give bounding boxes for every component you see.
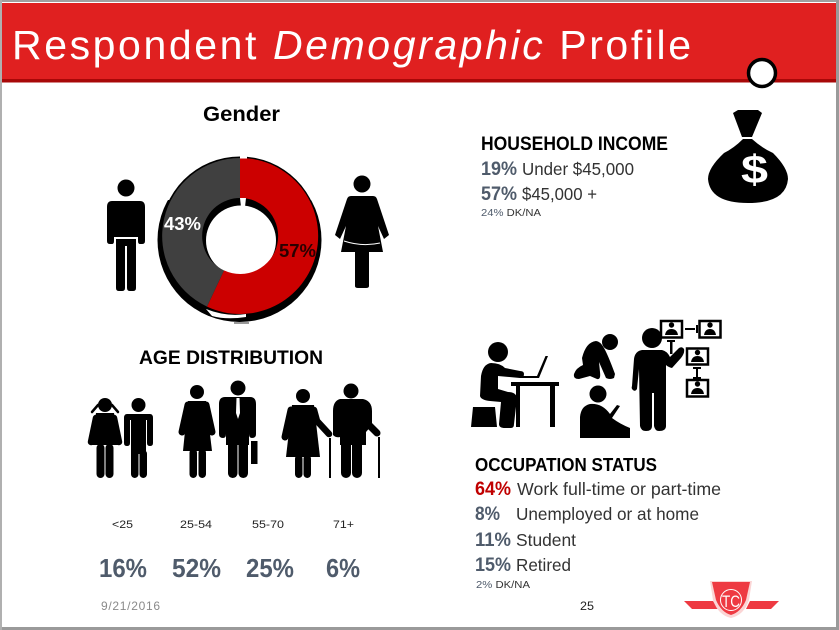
age labels: <25 [112,519,133,531]
income under 45000: 19% [481,159,517,180]
household income block [481,134,668,219]
occupation status block [475,454,721,591]
income under 45000: Under $45,000 [522,159,634,179]
page number: 25 [580,599,594,613]
occupation: unemployed: 8% [475,504,500,525]
label 43%: 43% [164,214,201,234]
age labels [112,519,354,531]
donut chart: gender [157,156,322,324]
icon: man [107,180,145,291]
icon: sitting child with tablet [580,386,630,438]
icon: TTC logo: TC [722,592,740,611]
icon: man with network screens [632,321,720,431]
occupation dk/na: 2% DK/NA [476,580,530,591]
icon: adults [182,380,258,478]
header banner [2,3,836,82]
occupation: employed: Work full-time or part-time [517,479,721,499]
age percentages: 25% [246,553,294,583]
label 57%: 57% [279,241,316,261]
occupation: retired: Retired [516,555,571,575]
age labels: 25-54 [180,519,212,531]
date: 9/21/2016 [101,599,160,613]
occupation: employed: 64% [475,479,511,500]
income 45000 plus: 57% [481,184,517,205]
age percentages: 16% [99,553,147,583]
age labels: 71+ [333,519,354,531]
occupation: retired: 15% [475,555,511,576]
icon: TTC logo [684,581,779,618]
age percentages: 6% [326,553,360,583]
icon: money bag [708,110,788,203]
icon: person at laptop [471,342,559,428]
header circle ornament [748,60,776,86]
icon: children [91,398,153,478]
age labels: 55-70 [252,519,284,531]
occupation: unemployed: Unemployed or at home [516,504,699,524]
occupation: student [475,530,576,551]
network screens [661,321,720,396]
age percentages: 52% [172,553,221,583]
gender heading: Gender [203,103,280,126]
icon: seniors [285,384,380,478]
icon: crawling child [574,334,618,379]
occupation: student: Student [516,530,576,550]
income dk/na: 24% DK/NA [481,208,541,219]
occupation: retired [475,555,571,576]
age distribution heading: AGE DISTRIBUTION [139,348,323,369]
age percentages [99,553,360,583]
occupation heading: OCCUPATION STATUS [475,454,657,475]
icon: money bag: $ [741,148,768,192]
income heading: HOUSEHOLD INCOME [481,134,668,155]
income 45000 plus: $45,000 + [522,184,597,204]
income 45000 plus [481,184,597,205]
occupation: student: 11% [475,530,511,551]
income under 45000 [481,159,634,180]
title: Respondent Demographic Profile [12,22,691,68]
icon: woman [335,176,389,288]
